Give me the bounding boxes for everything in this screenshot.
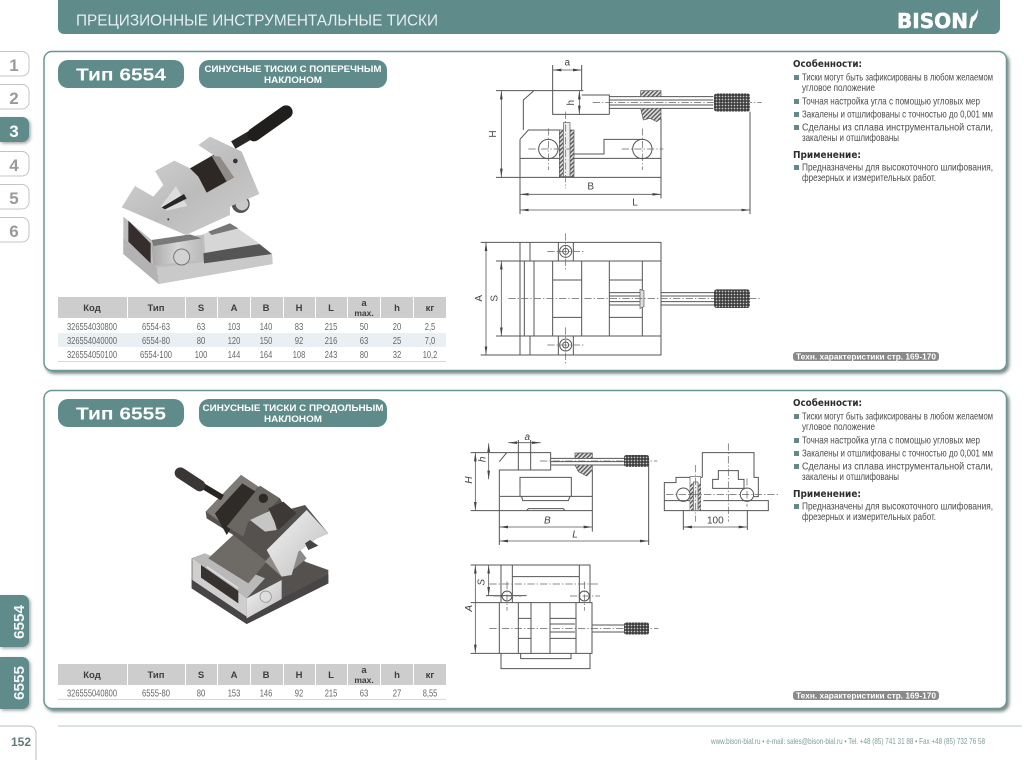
table: 6554 specifications: 243 (325, 349, 337, 361)
table: 6554 specifications: a (361, 298, 367, 309)
type heading 6554 (58, 60, 184, 88)
table: 6554 specifications: h (394, 303, 400, 314)
table: 6555 specifications: 153 (228, 688, 240, 700)
table: 6554 specifications: 83 (295, 321, 303, 333)
table: 6554 specifications: 7,0 (425, 335, 435, 347)
table: 6555 specifications: 92 (295, 688, 303, 700)
features list 6555 (793, 397, 993, 483)
drawing: 6554 plan view (474, 233, 762, 363)
table: 6554 specifications: кг (426, 303, 434, 314)
features list 6555: Сделаны из сплава инструментальной стали, (802, 460, 993, 472)
table: 6554 specifications: 326554030800 (67, 321, 117, 333)
photo: vise 6555 (180, 473, 328, 624)
table: 6554 specifications: 25 (393, 335, 401, 347)
table: 6555 specifications: L (328, 670, 334, 681)
table: 6554 specifications: max. (354, 308, 374, 318)
technical reference note 6555: Техн. характеристики стр. 169-170 (796, 692, 937, 700)
table: 6554 specifications: 108 (293, 349, 305, 361)
table: 6555 specifications: h (394, 670, 400, 681)
table: 6555 specifications (58, 664, 446, 700)
technical reference note 6554: Техн. характеристики стр. 169-170 (796, 352, 937, 362)
application text 6554: Применение: (793, 150, 861, 161)
table: 6554 specifications: 10,2 (423, 349, 437, 361)
section tabs 1-6: 1 (9, 56, 19, 75)
table: 6555 specifications: Тип (147, 670, 165, 681)
drawing: 6554 side view: B (587, 181, 594, 192)
drawing: 6555 side view: a (525, 432, 531, 443)
table: 6554 specifications: 103 (228, 321, 240, 333)
table: 6555 specifications: max. (354, 675, 374, 685)
application text 6555: фрезерных и измерительных работ. (802, 511, 936, 523)
drawing: 6555 front view: 100 (707, 515, 724, 526)
features list 6554 (793, 58, 993, 144)
table: 6554 specifications: 120 (228, 335, 240, 347)
section tabs 1-6 (0, 52, 29, 242)
table: 6554 specifications: 216 (325, 335, 337, 347)
table: 6554 specifications: B (263, 303, 270, 314)
table: 6554 specifications: H (296, 303, 303, 314)
table: 6555 specifications: 63 (360, 688, 368, 700)
subtitle pill: НАКЛОНОМ (264, 414, 322, 425)
table: 6554 specifications: L (328, 303, 334, 314)
application text 6554 (793, 150, 993, 184)
table: 6554 specifications (58, 297, 446, 362)
type tab 6554: 6554 (12, 605, 28, 639)
table: 6554 specifications: 20 (393, 321, 401, 333)
drawing: 6554 side view: H (488, 130, 499, 138)
subtitle pill: СИНУСНЫЕ ТИСКИ С ПРОДОЛЬНЫМ (202, 403, 384, 414)
drawing: 6554 plan view: S (489, 295, 500, 302)
page number tab (0, 726, 36, 760)
type heading 6554: Тип 6554 (76, 64, 166, 84)
subtitle pill: СИНУСНЫЕ ТИСКИ С ПОПЕРЕЧНЫМ (204, 64, 382, 75)
table: 6555 specifications: a (361, 665, 367, 676)
table: 6554 specifications: 6554-63 (142, 321, 170, 333)
table: 6554 specifications: 80 (360, 349, 368, 361)
features list 6554: закалены и отшлифованы (802, 132, 899, 144)
drawing: 6555 plan view: A (464, 605, 475, 613)
drawing: 6554 side view (488, 58, 762, 214)
type tab 6555: 6555 (12, 666, 28, 700)
type heading 6555 (58, 399, 184, 427)
features list 6554: угловое положение (802, 82, 875, 94)
drawing: 6555 side view: h (477, 456, 488, 462)
type heading 6555: Тип 6555 (76, 404, 166, 424)
table: 6554 specifications: 326554050100 (67, 349, 117, 361)
table: 6555 specifications: 146 (260, 688, 272, 700)
drawing: 6555 plan view (464, 565, 658, 669)
drawing: 6554 plan view: A (474, 295, 485, 302)
application text 6554: фрезерных и измерительных работ. (802, 172, 936, 184)
subtitle pill (199, 60, 387, 88)
table: 6554 specifications: Код (83, 303, 101, 314)
table: 6554 specifications: A (231, 303, 238, 314)
table: 6554 specifications: 32 (393, 349, 401, 361)
table: 6555 specifications: Код (83, 670, 101, 681)
section tabs 1-6: 2 (9, 89, 19, 108)
table: 6555 specifications: 6555-80 (142, 688, 170, 700)
drawing: 6554 side view: L (632, 197, 638, 208)
table: 6555 specifications: A (231, 670, 238, 681)
section tabs 1-6: 6 (9, 222, 19, 241)
table: 6555 specifications: 80 (197, 688, 205, 700)
table: 6554 specifications: 144 (228, 349, 240, 361)
header bar (58, 0, 1000, 34)
table: 6554 specifications: 2,5 (425, 321, 435, 333)
table: 6555 specifications: кг (426, 670, 434, 681)
table: 6555 specifications: 215 (325, 688, 337, 700)
application text 6555: Применение: (793, 489, 861, 500)
table: 6555 specifications: 8,55 (423, 688, 437, 700)
table: 6555 specifications: B (263, 670, 270, 681)
panel: type 6555 (44, 390, 1006, 708)
table: 6554 specifications: 164 (260, 349, 272, 361)
table: 6555 specifications: H (296, 670, 303, 681)
application text 6555 (793, 489, 993, 523)
drawing: 6555 side view: H (464, 476, 475, 484)
table: 6554 specifications: 6554-100 (140, 349, 172, 361)
drawing: 6555 plan view: S (477, 579, 488, 586)
table: 6555 specifications: 27 (393, 688, 401, 700)
type tab 6555 (0, 657, 29, 709)
section tabs 1-6: 5 (9, 189, 19, 208)
section tabs 1-6: 4 (9, 156, 19, 175)
features list 6555: угловое положение (802, 421, 875, 433)
drawing: 6554 side view: h (566, 100, 577, 105)
table: 6554 specifications: 150 (260, 335, 272, 347)
table: 6554 specifications: 140 (260, 321, 272, 333)
photo: vise 6554 (122, 112, 286, 284)
drawing: 6555 front view (664, 443, 778, 530)
page number tab: 152 (11, 735, 31, 749)
table: 6555 specifications: S (198, 670, 204, 681)
panel: type 6554 (44, 52, 1006, 370)
table: 6554 specifications: 80 (197, 335, 205, 347)
subtitle pill (199, 399, 387, 427)
table: 6554 specifications: Тип (147, 303, 165, 314)
features list 6555: закалены и отшлифованы (802, 471, 899, 483)
section tabs 1-6: 3 (9, 122, 19, 141)
logo: Bison: BISON (897, 9, 968, 33)
subtitle pill: НАКЛОНОМ (264, 75, 322, 86)
table: 6554 specifications: 50 (360, 321, 368, 333)
table: 6554 specifications: 63 (360, 335, 368, 347)
table: 6555 specifications: 326555040800 (67, 688, 117, 700)
drawing: 6554 side view: a (565, 58, 571, 69)
drawing: 6555 side view (464, 432, 657, 545)
page title: ПРЕЦИЗИОННЫЕ ИНСТРУМЕНТАЛЬНЫЕ ТИСКИ (76, 12, 438, 30)
table: 6554 specifications: S (198, 303, 204, 314)
features list 6555: Особенности: (793, 397, 862, 409)
features list 6554: Особенности: (793, 58, 862, 70)
drawing: 6555 side view: L (572, 529, 578, 540)
table: 6554 specifications: 215 (325, 321, 337, 333)
table: 6554 specifications: 6554-80 (142, 335, 170, 347)
table: 6554 specifications: 100 (195, 349, 207, 361)
table: 6554 specifications: 63 (197, 321, 205, 333)
type tab 6554 (0, 595, 29, 647)
table: 6554 specifications: 92 (295, 335, 303, 347)
drawing: 6555 side view: B (544, 515, 551, 526)
features list 6554: Сделаны из сплава инструментальной стали, (802, 122, 993, 134)
table: 6554 specifications: 326554040000 (67, 335, 117, 347)
